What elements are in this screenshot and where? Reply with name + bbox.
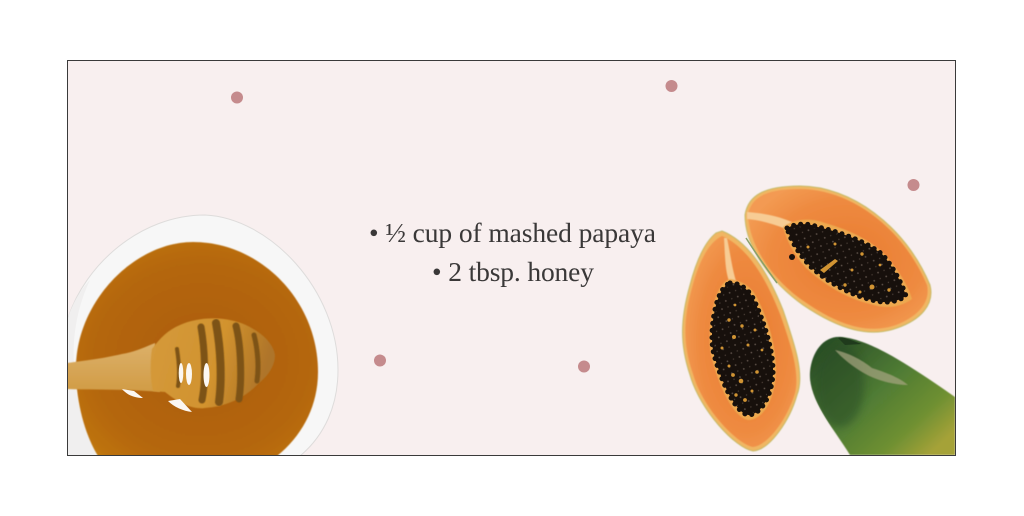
dipper highlights: [122, 363, 210, 412]
bowl left shadow: [68, 298, 76, 455]
left papaya half: [682, 231, 800, 451]
bowl rim: [68, 215, 338, 456]
top half seeds: [787, 224, 906, 302]
top half inner light edge: [747, 212, 792, 229]
decorative dots: [231, 80, 920, 372]
panel: background: [68, 60, 956, 456]
left half centre line: [724, 238, 736, 281]
dipper grooves: [177, 323, 258, 402]
top half seed bed: [783, 220, 912, 307]
green skin sliver: [746, 238, 777, 283]
dipper head: [151, 318, 275, 408]
icon: bowl of honey with dipper: [67, 215, 338, 456]
ingredient: honey: • 2 tbsp. honey: [432, 256, 594, 287]
left half seed bed: [710, 279, 776, 420]
top papaya half: [745, 186, 931, 332]
ingredient: papaya: • ½ cup of mashed papaya: [369, 217, 656, 248]
honey: [76, 242, 318, 456]
ingredient list text: [369, 217, 656, 287]
dipper handle: [67, 343, 160, 392]
whole green papaya: [810, 337, 955, 455]
icon: papayas: [682, 186, 955, 455]
left half seeds: [712, 283, 773, 415]
